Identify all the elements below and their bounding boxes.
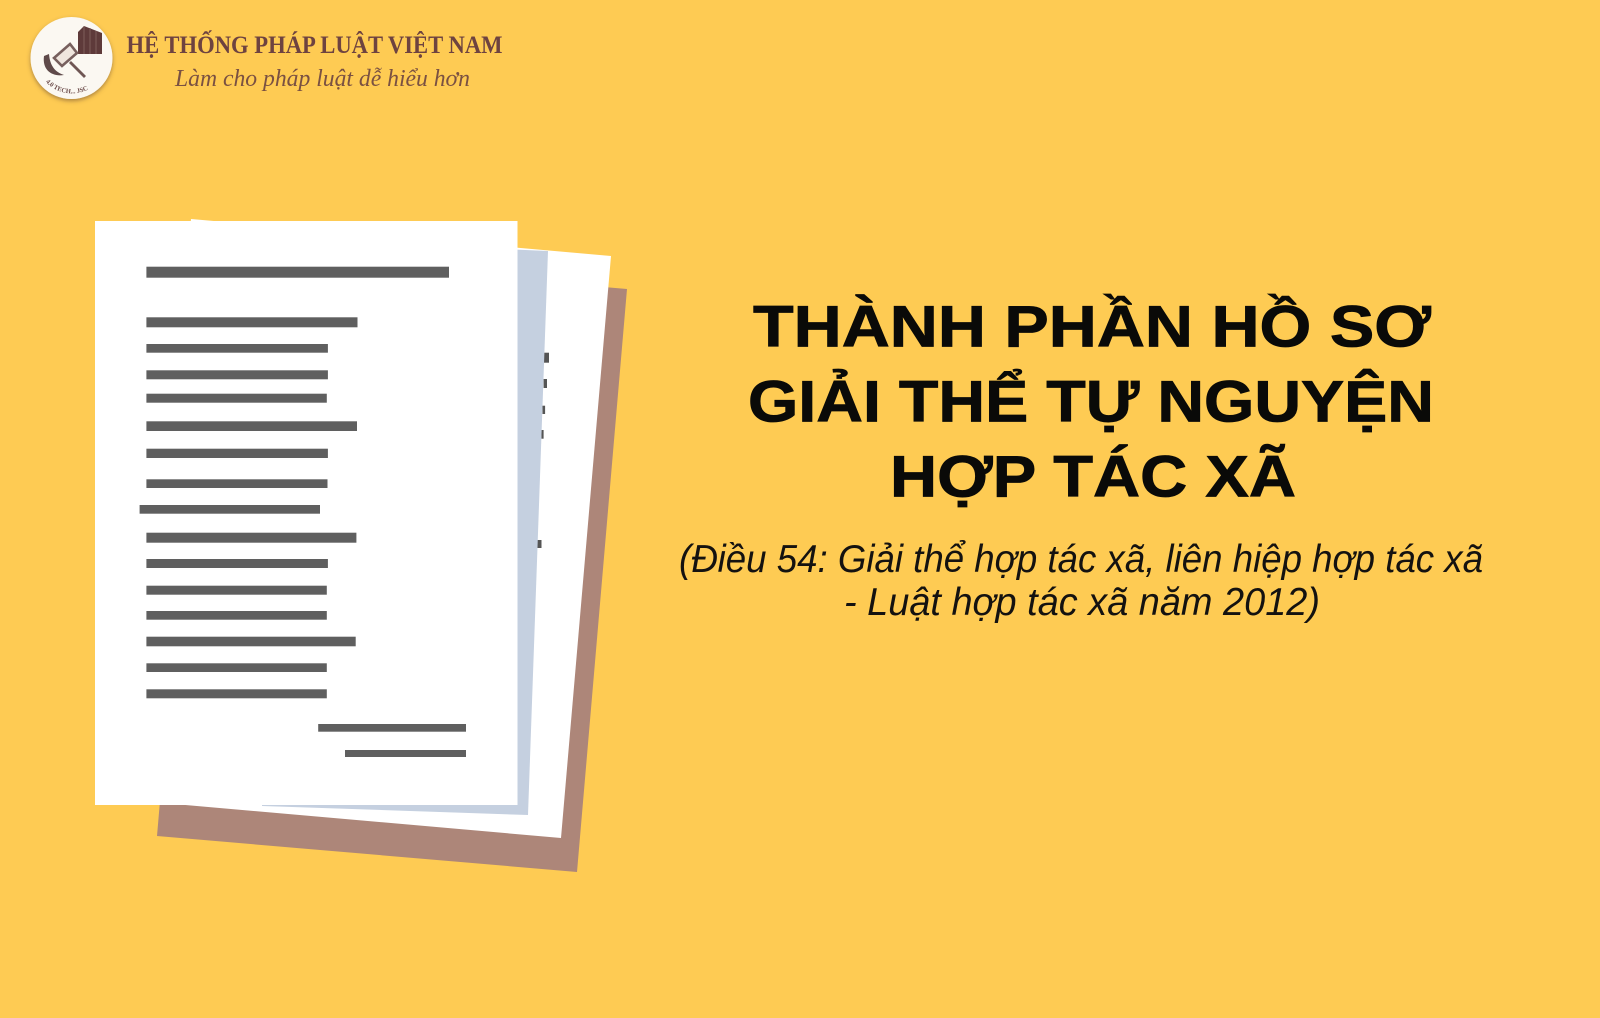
subtitle: legal reference: - Luật hợp tác xã năm 2012): [844, 581, 1320, 624]
logo name: HỆ THỐNG PHÁP LUẬT VIỆT NAM: [126, 30, 502, 59]
title: THÀNH PHẦN HỒ SƠ: [753, 294, 1432, 360]
icon: round logo with gavel and books: [28, 16, 115, 104]
front sheet: [95, 221, 518, 805]
illustration: stack of documents: [95, 219, 627, 872]
back brown sheet: [157, 253, 627, 872]
title: GIẢI THỂ TỰ NGUYỆN: [748, 370, 1434, 434]
subtitle: legal reference: (Điều 54: Giải thể hợp tác xã, liên hiệp hợp tác xã: [679, 538, 1483, 581]
blue sheet: [262, 240, 548, 815]
logo slogan: Làm cho pháp luật dễ hiểu hơn: [174, 66, 470, 92]
white rotated sheet: [140, 219, 611, 838]
title: HỢP TÁC XÃ: [890, 444, 1296, 510]
title: [748, 294, 1434, 510]
logo: Hệ thống pháp luật Việt Nam: [28, 16, 502, 104]
subtitle: legal reference: [679, 538, 1483, 624]
icon: round logo with gavel and books: 4.0 TECH... JSC: [46, 80, 88, 94]
